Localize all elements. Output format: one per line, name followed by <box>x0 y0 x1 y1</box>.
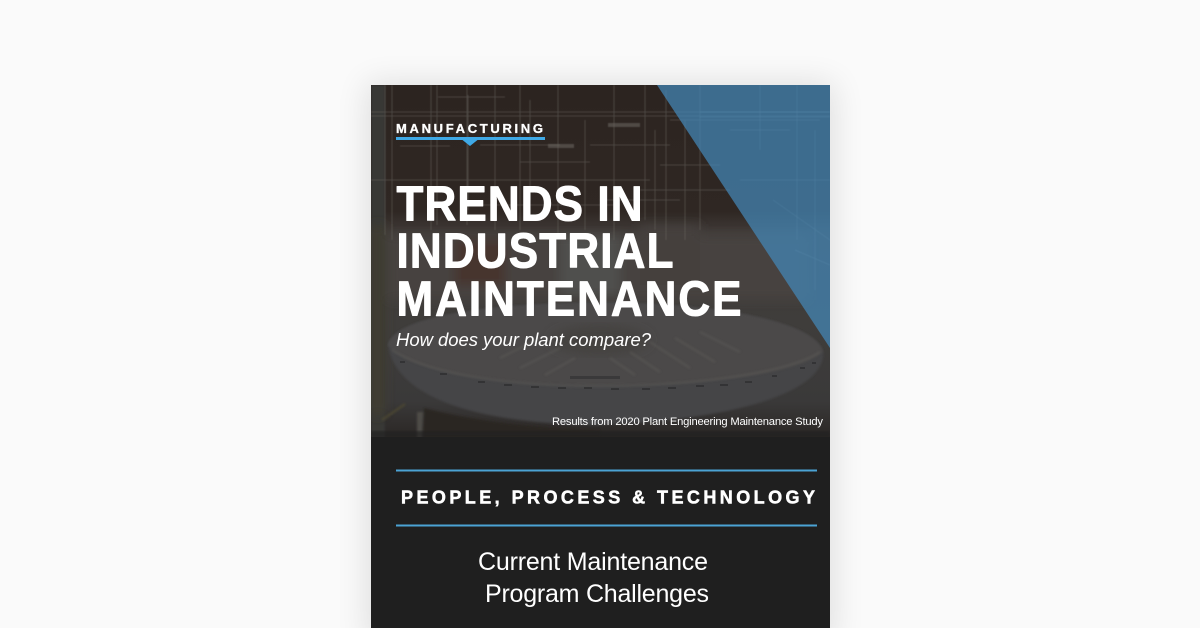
photo: left wall tint <box>371 85 385 437</box>
blue triangle overlay <box>657 85 830 348</box>
label underline with pointer <box>396 137 545 146</box>
heading: current maintenance program challenges: Program Challenges <box>485 580 709 608</box>
title <box>396 176 742 326</box>
label text: MANUFACTURING <box>396 121 543 136</box>
title: MAINTENANCE <box>396 271 741 326</box>
triangle: faint structure lines <box>700 85 830 290</box>
title: TRENDS IN <box>396 176 642 231</box>
card shadow <box>367 83 834 628</box>
heading: current maintenance program challenges <box>478 548 709 608</box>
subtitle: How does your plant compare? <box>396 329 652 350</box>
section label: manufacturing <box>396 121 545 146</box>
photo: round conveyor table <box>388 303 823 425</box>
title: INDUSTRIAL <box>396 223 674 278</box>
band heading: PEOPLE, PROCESS & TECHNOLOGY <box>401 488 815 508</box>
source note: Results from 2020 Plant Engineering Maintenance Study <box>552 416 823 428</box>
panel: dark lower section <box>371 437 830 628</box>
photo: mid-floor machinery <box>383 226 792 298</box>
panel: hero photo of factory conveyor <box>371 85 830 437</box>
photo: ceiling structure lines <box>371 85 726 240</box>
photo: small ceiling fixtures <box>548 123 640 148</box>
infographic card <box>371 85 830 628</box>
photo: table legs and floor <box>382 404 568 437</box>
bottom edge shadow of photo <box>371 431 830 437</box>
photo: conveyor rollers <box>567 385 647 386</box>
photo: conveyor bolts <box>400 361 816 390</box>
heading: current maintenance program challenges: Current Maintenance <box>478 548 708 576</box>
